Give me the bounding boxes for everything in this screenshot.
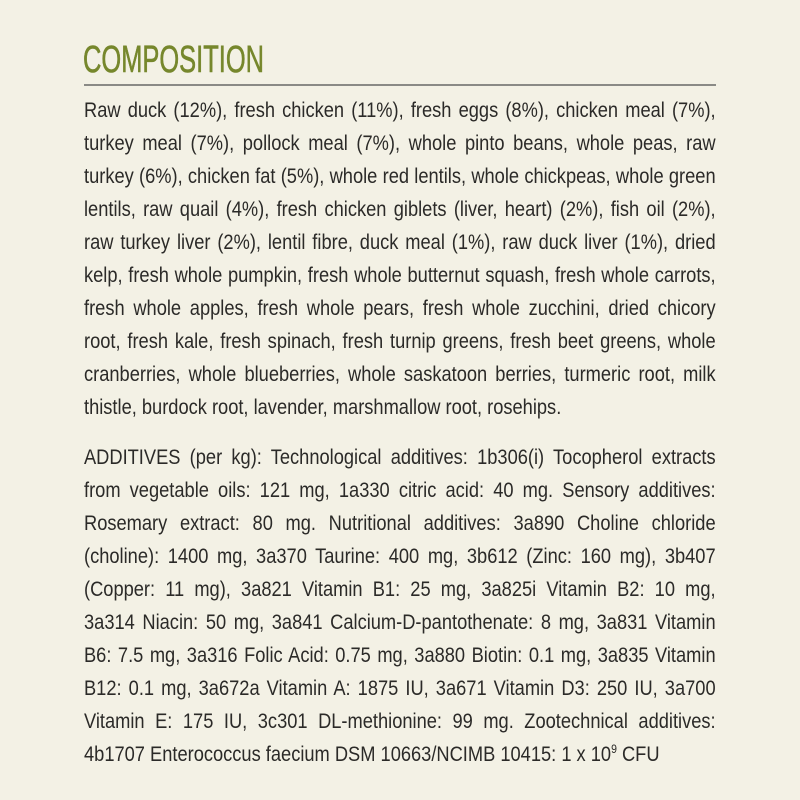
text block: ingredients: cranberries, whole blueberries, whole saskatoon berries, turmeric root, milk [84,363,716,386]
text block: ingredients: turkey meal (7%), pollock meal (7%), whole pinto beans, whole peas, raw [84,132,716,155]
text block: additives: Rosemary extract: 80 mg. Nutritional additives: 3a890 Choline chloride [84,512,716,535]
title: COMPOSITION [83,39,264,81]
text block: ingredients: raw turkey liver (2%), lentil fibre, duck meal (1%), raw duck liver (1%), dried [84,231,716,254]
text block: additives: from vegetable oils: 121 mg, 1a330 citric acid: 40 mg. Sensory additives: [84,479,716,502]
text block: additives: (choline): 1400 mg, 3a370 Taurine: 400 mg, 3b612 (Zinc: 160 mg), 3b407 [84,545,716,568]
text block: ingredients: kelp, fresh whole pumpkin, fresh whole butternut squash, fresh whole carrots, [84,264,716,287]
text block: additives: 3a314 Niacin: 50 mg, 3a841 Calcium-D-pantothenate: 8 mg, 3a831 Vitamin [84,611,716,634]
text block: additives: B12: 0.1 mg, 3a672a Vitamin A: 1875 IU, 3a671 Vitamin D3: 250 IU, 3a700 [84,677,716,700]
text block: ingredients: lentils, raw quail (4%), fresh chicken giblets (liver, heart) (2%), fish oil (2%), [84,198,716,221]
text block: ingredients: thistle, burdock root, lavender, marshmallow root, rosehips. [84,396,561,419]
text block: additives: 4b1707 Enterococcus faecium DSM 10663/NCIMB 10415: 1 x 109 CFU [84,742,660,766]
text block: additives: Vitamin E: 175 IU, 3c301 DL-methionine: 99 mg. Zootechnical additives: [84,710,716,733]
text block: additives [84,446,716,766]
text block: additives: (Copper: 11 mg), 3a821 Vitamin B1: 25 mg, 3a825i Vitamin B2: 10 mg, [84,578,716,601]
text block: additives: ADDITIVES (per kg): Technological additives: 1b306(i) Tocopherol extracts [84,446,716,469]
text block: ingredients: turkey (6%), chicken fat (5%), whole red lentils, whole chickpeas, whole green [84,165,716,188]
text block: ingredients: fresh whole apples, fresh whole pears, fresh whole zucchini, dried chicory [84,297,716,320]
text block: ingredients [84,99,716,419]
text block: ingredients: root, fresh kale, fresh spinach, fresh turnip greens, fresh beet greens, whole [84,330,716,353]
text block: additives: B6: 7.5 mg, 3a316 Folic Acid: 0.75 mg, 3a880 Biotin: 0.1 mg, 3a835 Vitamin [84,644,716,667]
text block: ingredients: Raw duck (12%), fresh chicken (11%), fresh eggs (8%), chicken meal (7%), [84,99,716,122]
